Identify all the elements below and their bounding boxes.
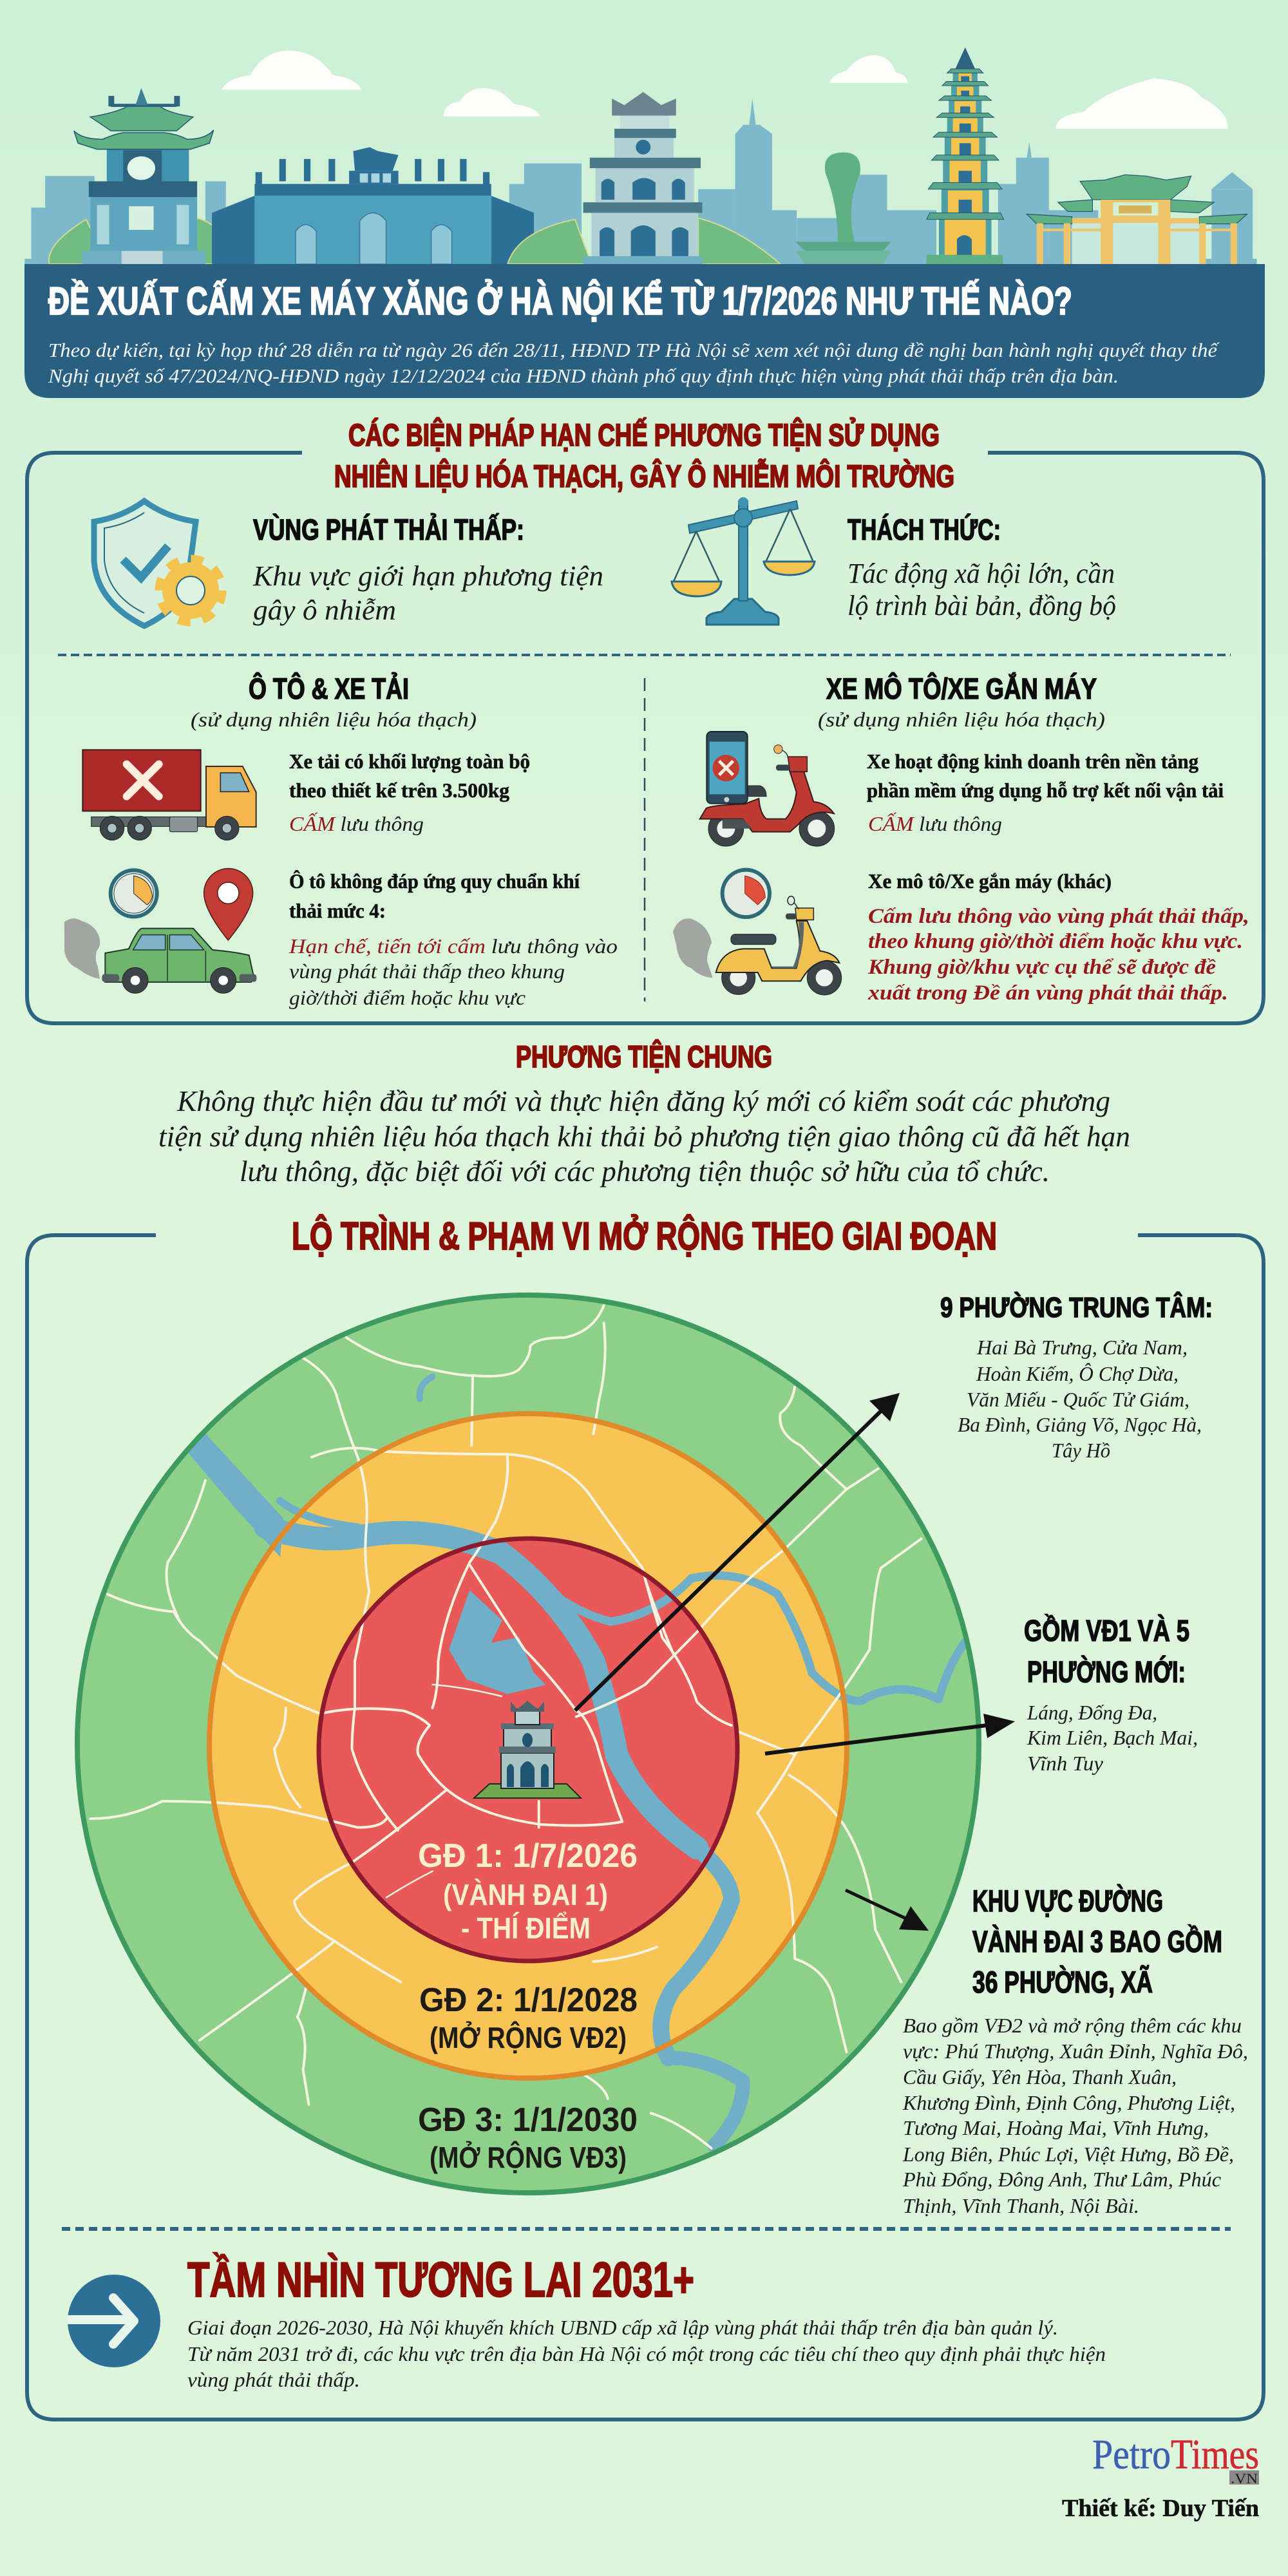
map: concentric zones	[77, 1295, 979, 2193]
text: car rule: thải mức 4:	[289, 899, 386, 922]
callout: ring road three: Khương Đình, Định Công, Phương Liệt,	[902, 2091, 1235, 2114]
callout: nine central wards: Văn Miếu - Quốc Tử Giám,	[967, 1388, 1189, 1411]
panel heading	[334, 417, 954, 494]
landmark: Khue Van Cac	[49, 88, 238, 264]
block: future vision: Từ năm 2031 trở đi, các khu vực trên địa bàn Hà Nội có một trong các tiêu chí theo quy định phải thực hiện	[187, 2342, 1106, 2365]
header banner	[24, 264, 1265, 398]
phase 3 label: (MỞ RỘNG VĐ3)	[430, 2141, 627, 2174]
block: future vision: Giai đoạn 2026-2030, Hà Nội khuyến khích UBND cấp xã lập vùng phát thải thấp trên địa bàn quản lý.	[187, 2316, 1058, 2339]
callout: ring road three: Long Biên, Phúc Lợi, Việt Hưng, Bồ Đề,	[902, 2143, 1234, 2166]
text: truck rule	[289, 750, 530, 835]
block: low emission zone: gây ô nhiễm	[253, 594, 396, 626]
callout: ring road three: Thịnh, Vĩnh Thanh, Nội Bài.	[903, 2194, 1139, 2217]
block: challenges	[848, 513, 1116, 621]
callout: ring road three: Tương Mai, Hoàng Mai, Vĩnh Hưng,	[903, 2116, 1209, 2139]
river network	[182, 1377, 966, 2145]
arrow: to ring road three	[846, 1890, 929, 1931]
map labels: phases	[418, 1837, 638, 2174]
text: platform motorbikes rule: phần mềm ứng dụng hỗ trợ kết nối vận tải	[867, 779, 1224, 802]
phase 1 label: - THÍ ĐIỂM	[461, 1911, 591, 1945]
icons: clock, pin, smoke and car	[64, 869, 256, 993]
arrow: to ring road one	[765, 1714, 1015, 1754]
logo: PetroTimes	[1092, 2431, 1259, 2486]
common vehicles paragraph: Không thực hiện đầu tư mới và thực hiện đăng ký mới có kiểm soát các phương	[176, 1084, 1110, 1117]
text: car rule: giờ/thời điểm hoặc khu vực	[289, 986, 526, 1009]
panel heading: CÁC BIỆN PHÁP HẠN CHẾ PHƯƠNG TIỆN SỬ DỤNG	[348, 417, 940, 453]
column heading: motorbikes: (sử dụng nhiên liệu hóa thạch)	[818, 708, 1105, 731]
text: truck rule: theo thiết kế trên 3.500kg	[289, 779, 509, 802]
common vehicles paragraph: tiện sử dụng nhiên liệu hóa thạch khi thải bỏ phương tiện giao thông cũ đã hết hạn	[158, 1120, 1130, 1153]
callout: nine central wards: Hoàn Kiếm, Ô Chợ Dừa,	[976, 1362, 1179, 1385]
phase 1 label: GĐ 1: 1/7/2026	[418, 1837, 638, 1875]
icon: Turtle Tower on map	[474, 1701, 581, 1798]
intro text: Theo dự kiến, tại kỳ họp thứ 28 diễn ra từ ngày 26 đến 28/11, HĐND TP Hà Nội sẽ xem xét nội dung đề nghị ban hành nghị quyết thay thế	[48, 339, 1220, 361]
text: truck rule: CẤM lưu thông	[289, 812, 424, 835]
callout: nine central wards	[940, 1291, 1213, 1462]
callout: ring road one and five new wards: Vĩnh Tuy	[1027, 1752, 1104, 1775]
landmark: pagoda	[927, 47, 1004, 264]
callout: ring road three	[902, 1884, 1248, 2217]
text: car rule	[289, 869, 618, 1009]
common vehicles paragraph: lưu thông, đặc biệt đối với các phương tiện thuộc sở hữu của tổ chức.	[240, 1155, 1050, 1188]
roadmap heading: LỘ TRÌNH & PHẠM VI MỞ RỘNG THEO GIAI ĐOẠN	[292, 1215, 997, 1258]
callout: nine central wards: 9 PHƯỜNG TRUNG TÂM:	[940, 1291, 1213, 1323]
callout: nine central wards: Hai Bà Trưng, Cửa Nam,	[976, 1336, 1188, 1359]
text: other motorbikes rule: Xe mô tô/Xe gắn máy (khác)	[868, 869, 1112, 893]
landmark: Turtle Tower	[507, 92, 781, 264]
text: truck rule: Xe tải có khối lượng toàn bộ	[289, 750, 530, 773]
icon: balance scale	[672, 497, 815, 625]
icon: phone and red scooter	[700, 732, 835, 846]
text: other motorbikes rule: Khung giờ/khu vực cụ thể sẽ được đề	[867, 956, 1216, 979]
icons: clock, smoke and yellow scooter	[673, 870, 842, 995]
column heading: cars and trucks: Ô TÔ & XE TẢI	[249, 672, 409, 705]
landmark: monument	[795, 153, 891, 264]
text: other motorbikes rule	[867, 869, 1249, 1005]
callout: ring road three: Bao gồm VĐ2 và mở rộng thêm các khu	[903, 2014, 1242, 2037]
column heading: cars and trucks	[191, 672, 477, 731]
block: future vision: vùng phát thải thấp.	[187, 2368, 360, 2391]
background city buildings	[24, 99, 1257, 264]
block: low emission zone: Khu vực giới hạn phương tiện	[252, 560, 603, 592]
logo: PetroTimes: Petro	[1092, 2431, 1171, 2478]
text: other motorbikes rule: Cấm lưu thông vào vùng phát thải thấp,	[868, 905, 1249, 928]
phase 3 label: GĐ 3: 1/1/2030	[418, 2101, 638, 2139]
icon: arrow circle	[68, 2275, 160, 2367]
block: low emission zone: VÙNG PHÁT THẢI THẤP:	[253, 513, 524, 546]
intro text: Nghị quyết số 47/2024/NQ-HĐND ngày 12/12/2024 của HĐND thành phố quy định thực hiện vùng phát thải thấp trên địa bàn.	[48, 365, 1119, 387]
callout: ring road three: Phù Đổng, Đông Anh, Thư Lâm, Phúc	[902, 2168, 1221, 2191]
callout: nine central wards: Ba Đình, Giảng Võ, Ngọc Hà,	[958, 1413, 1202, 1436]
arrow: centre to nine wards	[575, 1393, 900, 1710]
panel: measures	[27, 417, 1264, 1023]
block: low emission zone	[252, 513, 603, 626]
column heading: motorbikes: XE MÔ TÔ/XE GẮN MÁY	[826, 672, 1097, 705]
panel: roadmap	[27, 1215, 1264, 2420]
text: platform motorbikes rule: Xe hoạt động kinh doanh trên nền tảng	[867, 750, 1198, 773]
text: car rule: vùng phát thải thấp theo khung	[289, 960, 565, 983]
text: platform motorbikes rule	[867, 750, 1224, 835]
logo: PetroTimes: Times	[1171, 2431, 1259, 2478]
text: car rule: Hạn chế, tiến tới cấm lưu thông vào	[289, 934, 618, 958]
callout: ring road three: vực: Phú Thượng, Xuân Đỉnh, Nghĩa Đô,	[903, 2040, 1248, 2063]
clouds	[222, 50, 1228, 129]
callout: nine central wards: Tây Hồ	[1052, 1439, 1110, 1462]
icon: truck	[82, 750, 256, 840]
phase 1 label: (VÀNH ĐAI 1)	[443, 1878, 608, 1911]
logo: PetroTimes: .VN	[1231, 2470, 1258, 2486]
landmark: gate	[1027, 175, 1247, 264]
phase 3 label	[418, 2101, 638, 2174]
callout: ring road three: 36 PHƯỜNG, XÃ	[972, 1965, 1153, 1999]
block: future vision	[187, 2253, 1106, 2391]
block: challenges: lộ trình bài bản, đồng bộ	[848, 590, 1116, 621]
callout: ring road one and five new wards: GỒM VĐ1 VÀ 5	[1024, 1614, 1189, 1647]
text: car rule: Ô tô không đáp ứng quy chuẩn khí	[289, 869, 580, 893]
phase 2 label	[419, 1982, 638, 2054]
text: platform motorbikes rule: CẤM lưu thông	[868, 812, 1002, 835]
intro text	[48, 339, 1220, 387]
block: challenges: Tác động xã hội lớn, cần	[848, 558, 1115, 589]
common vehicles paragraph	[158, 1084, 1130, 1188]
road network	[90, 1305, 922, 2148]
block: challenges: THÁCH THỨC:	[848, 513, 1001, 546]
text: other motorbikes rule: theo khung giờ/thời điểm hoặc khu vực.	[868, 930, 1243, 953]
block: future vision: TẦM NHÌN TƯƠNG LAI 2031+	[187, 2253, 694, 2307]
callout: ring road three: Cầu Giấy, Yên Hòa, Thanh Xuân,	[903, 2065, 1177, 2088]
phase 2 label: (MỞ RỘNG VĐ2)	[430, 2021, 627, 2054]
callout: ring road one and five new wards: PHƯỜNG MỚI:	[1027, 1655, 1186, 1689]
text: other motorbikes rule: xuất trong Đề án vùng phát thải thấp.	[867, 981, 1228, 1005]
icon: shield with gear	[94, 501, 222, 626]
header skyline illustration	[24, 47, 1257, 264]
landmark: citadel gate	[212, 147, 534, 264]
column heading: motorbikes	[818, 672, 1105, 731]
callout: ring road one and five new wards	[1024, 1614, 1198, 1775]
phase 2 label: GĐ 2: 1/1/2028	[419, 1982, 638, 2019]
callout: ring road three: KHU VỰC ĐƯỜNG	[972, 1884, 1163, 1918]
phase 1 label	[418, 1837, 638, 1945]
section: common vehicles	[158, 1039, 1130, 1188]
section: common vehicles: PHƯƠNG TIỆN CHUNG	[516, 1039, 772, 1074]
callout: ring road one and five new wards: Láng, Đống Đa,	[1027, 1701, 1157, 1724]
column heading: cars and trucks: (sử dụng nhiên liệu hóa thạch)	[191, 708, 477, 731]
callout: ring road one and five new wards: Kim Liên, Bạch Mai,	[1027, 1726, 1198, 1749]
designer credit: Thiết kế: Duy Tiến	[1062, 2495, 1259, 2522]
panel heading: NHIÊN LIỆU HÓA THẠCH, GÂY Ô NHIỄM MÔI TRƯỜNG	[334, 459, 954, 494]
